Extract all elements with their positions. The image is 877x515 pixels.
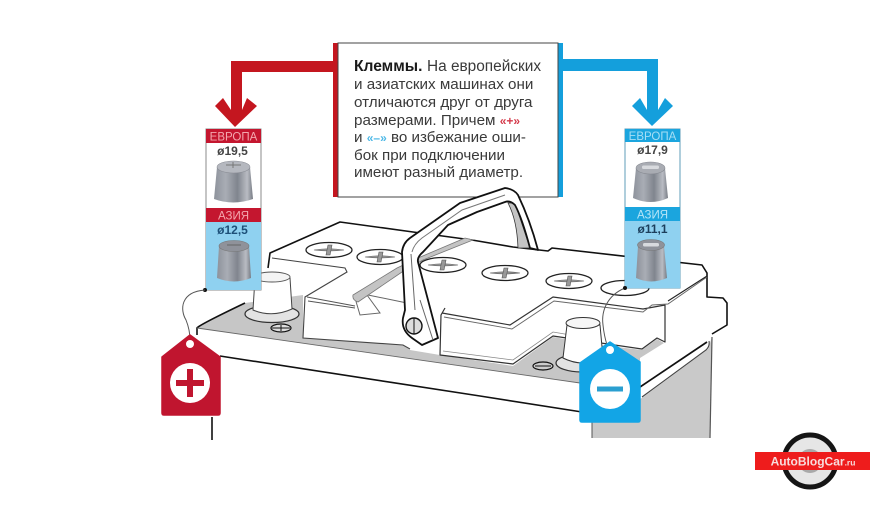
battery illustration — [197, 222, 727, 440]
cover outline — [268, 222, 727, 364]
logo wheel — [784, 435, 836, 487]
Europe terminal — [214, 161, 253, 202]
right size card — [625, 129, 680, 288]
front grey strap — [353, 238, 473, 302]
right post — [533, 318, 608, 372]
tag string — [183, 290, 205, 340]
Europe diameter: ø17,9 — [637, 143, 668, 157]
Asia panel — [625, 221, 680, 288]
Europe terminal — [633, 162, 668, 202]
handle — [402, 188, 538, 345]
Europe diameter: ø19,5 — [217, 144, 248, 158]
panel text: и — [354, 129, 367, 146]
panel text: «+» — [500, 114, 520, 128]
battery body — [212, 337, 712, 440]
text panel — [338, 43, 558, 197]
logo banner: AutoBlogCar.ru — [771, 454, 855, 468]
Europe header: ЕВРОПА — [210, 132, 258, 144]
lid platform — [197, 295, 664, 392]
Asia terminal — [217, 240, 251, 282]
tag string — [603, 288, 625, 345]
Asia diameter: ø11,1 — [637, 222, 668, 236]
Europe header: ЕВРОПА — [629, 131, 677, 143]
Asia header: АЗИЯ — [218, 210, 249, 222]
minus tag — [580, 286, 640, 422]
plus tag — [162, 290, 220, 415]
plus sign — [170, 363, 210, 403]
panel text: На европейских — [427, 58, 541, 75]
panel text: отличаются друг от друга — [354, 94, 533, 111]
Asia header: АЗИЯ — [637, 210, 668, 222]
panel text: бок при подключении — [354, 147, 505, 164]
card marker dot — [203, 288, 207, 292]
left post — [245, 272, 299, 332]
logo — [755, 435, 870, 487]
blue connector and arrow — [558, 43, 673, 197]
Asia diameter: ø12,5 — [217, 223, 248, 237]
panel text: размерами. Причем — [354, 112, 500, 129]
cover screws — [306, 242, 649, 296]
panel text: и азиатских машинах они — [354, 76, 533, 93]
Asia header — [625, 207, 680, 222]
Asia terminal — [636, 240, 667, 282]
minus sign — [590, 369, 630, 409]
panel text: Клеммы. — [354, 58, 422, 75]
Asia header — [206, 208, 261, 222]
left size card — [203, 129, 261, 292]
panel text: «–» во избежание оши- — [367, 129, 526, 146]
red connector and arrow — [215, 43, 338, 197]
panel text: имеют разный диаметр. — [354, 164, 523, 181]
Asia panel — [206, 222, 261, 290]
